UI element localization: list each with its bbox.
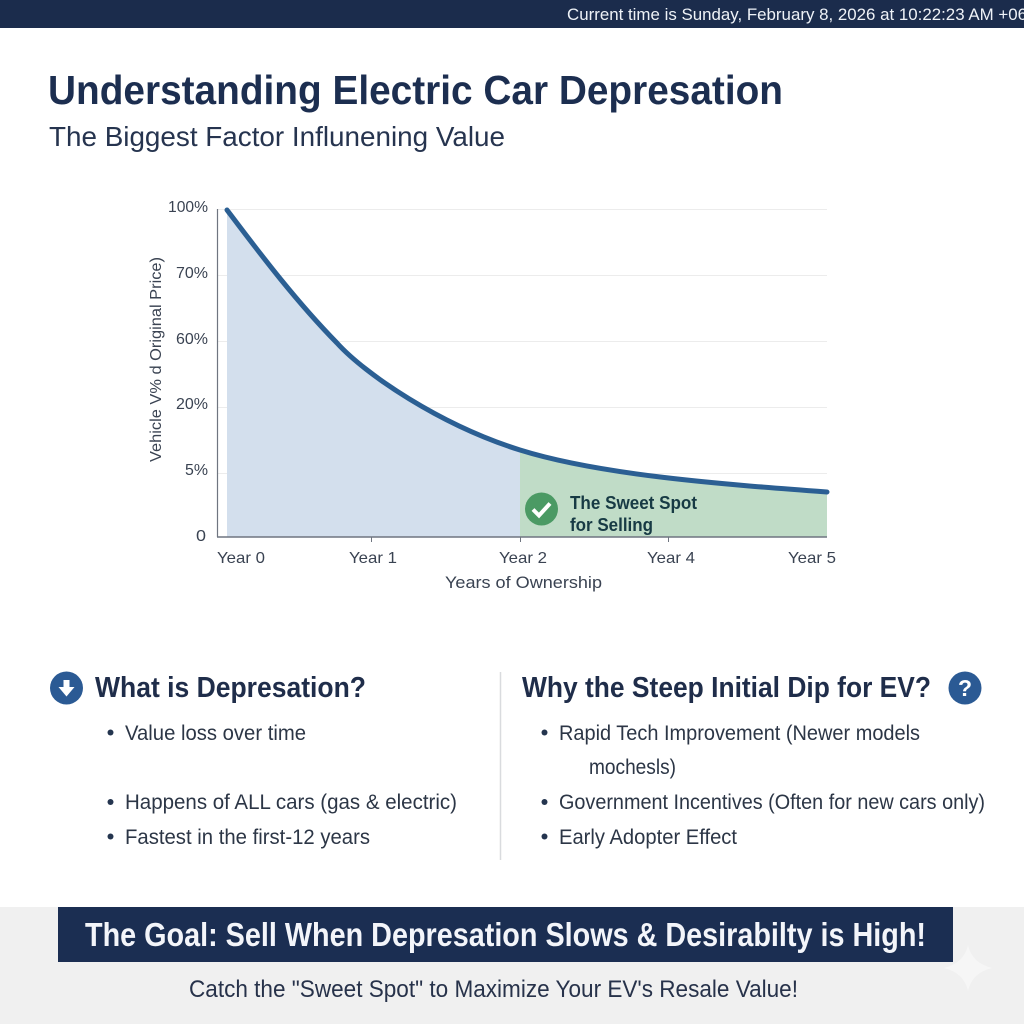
panel: what is depresation [50, 672, 457, 849]
x-axis labels: Year 0 [217, 550, 265, 567]
subtitle: The Biggest Factor Influnening Value [49, 121, 505, 152]
y-axis title: Vehicle V% d Original Price) [148, 257, 165, 462]
area under curve: sweet spot [520, 450, 827, 537]
bullet list: mochesls) [589, 756, 676, 779]
area under curve: early years [227, 210, 520, 537]
x-axis labels [217, 550, 836, 567]
title: Understanding Electric Car Depresation [48, 67, 783, 113]
bullet list: Early Adopter Effect [559, 826, 737, 849]
x-axis labels: Year 1 [349, 550, 397, 567]
y-axis labels: 5% [185, 462, 208, 479]
callout: sweet spot for selling [570, 493, 697, 535]
panel: why the steep initial dip [522, 672, 985, 849]
chart axes [217, 209, 827, 542]
top status bar: Current time is Sunday, February 8, 2026 at 10:22:23 AM +06 [567, 5, 1024, 24]
line chart: vehicle value over years of ownership [148, 199, 836, 592]
bullet list: Fastest in the first-12 years [125, 826, 370, 849]
closing message: Catch the "Sweet Spot" to Maximize Your EV's Resale Value! [189, 976, 798, 1003]
y-axis labels: 70% [176, 265, 208, 282]
x-axis labels: Year 5 [788, 550, 836, 567]
heading: Why the Steep Initial Dip for EV? [522, 672, 931, 704]
bullet list: Rapid Tech Improvement (Newer models [559, 722, 920, 745]
bullet list [542, 722, 985, 849]
y-axis labels: 0 [196, 528, 206, 545]
icon: question mark: ? [958, 675, 972, 701]
icon: question mark [948, 672, 982, 704]
x-axis labels: Year 2 [499, 550, 547, 567]
y-axis labels: 100% [168, 199, 208, 216]
x-axis labels: Year 4 [647, 550, 695, 567]
goal banner [58, 907, 953, 962]
bullet list [108, 722, 457, 849]
icon: sweet spot check mark [525, 492, 558, 526]
top status bar [0, 0, 1024, 28]
heading: What is Depresation? [95, 672, 366, 704]
y-axis labels [168, 199, 208, 545]
depreciation curve [227, 210, 827, 492]
bullet list: Value loss over time [125, 722, 306, 745]
goal banner: The Goal: Sell When Depresation Slows & Desirabilty is High! [85, 916, 926, 953]
y-axis labels: 20% [176, 396, 208, 413]
callout: sweet spot for selling: The Sweet Spot [570, 493, 697, 513]
icon: sparkle [944, 945, 992, 991]
y-axis labels: 60% [176, 331, 208, 348]
bullet list: Government Incentives (Often for new cars only) [559, 791, 985, 814]
icon: down arrow [50, 672, 83, 704]
bullet list: Happens of ALL cars (gas & electric) [125, 791, 457, 814]
footer band [0, 907, 1024, 1024]
callout: sweet spot for selling: for Selling [570, 515, 653, 535]
x-axis title: Years of Ownership [445, 573, 602, 592]
